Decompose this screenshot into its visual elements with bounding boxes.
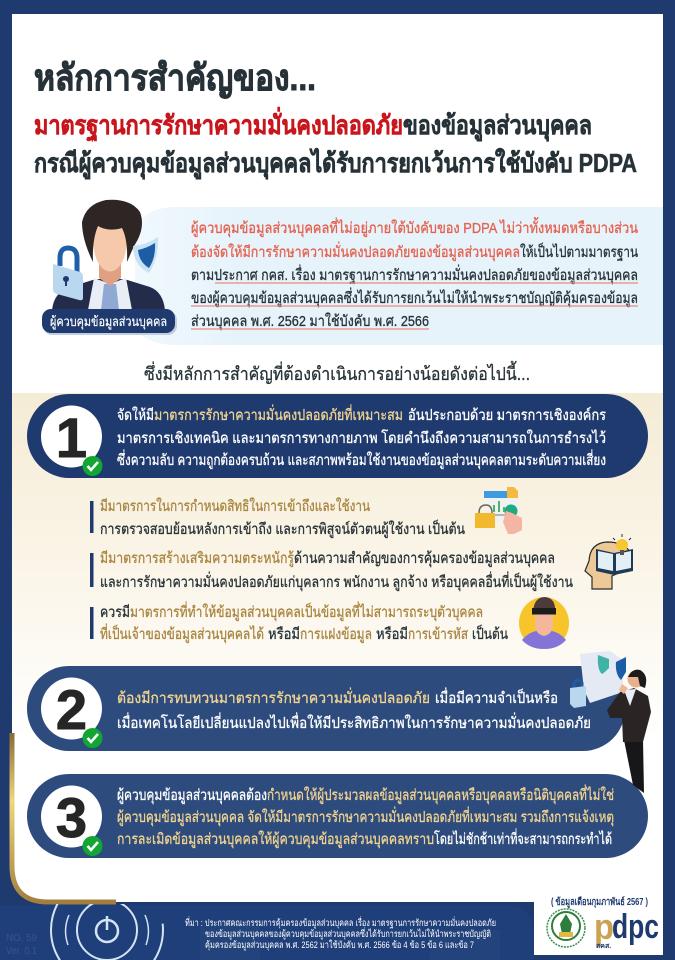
principle 3 text: ผู้ควบคุมข้อมูลส่วนบุคคลต้อง (117, 787, 267, 805)
principle 1 text (117, 404, 606, 470)
principle 2 text: เมื่อมีความจำเป็นหรือ (435, 687, 558, 707)
number 3 badge (41, 786, 102, 856)
icon: padlock (53, 248, 83, 300)
panel: principle 1 (27, 394, 648, 478)
sub-heading: ซึ่งมีหลักการสำคัญที่ต้องดำเนินการอย่างน้อยดังต่อไปนี้... (144, 361, 530, 384)
footer: navy band with power motif (0, 904, 534, 960)
logo: pdpc: dpc (612, 908, 659, 946)
version label: Ver. 0.1 (6, 946, 37, 957)
principle 3 text (117, 784, 614, 849)
icon: head with book (585, 534, 633, 589)
bullet 3: เป็นต้น (472, 624, 508, 643)
bullet 3: หรือมี (376, 626, 408, 643)
icon: shield (133, 237, 158, 273)
beige section background (12, 393, 663, 740)
bullet 3: หรือมี (268, 626, 300, 643)
source note: คุ้มครองข้อมูลส่วนบุคคล พ.ศ. 2562 มาใช้บังคับ พ.ศ. 2566 ข้อ 4 ข้อ 5 ข้อ 6 และข้อ 7 (205, 939, 474, 951)
principle 1 text: มาตรการรักษาความมั่นคงปลอดภัยที่เหมาะสม (154, 404, 403, 424)
number 2 badge: 2 (56, 678, 87, 741)
illustration: businessman with document (570, 651, 651, 793)
number 3 badge: 3 (56, 786, 87, 849)
bullet 2: ด้านความสำคัญของการคุ้มครองข้อมูลส่วนบุคคล (294, 550, 555, 568)
bullet 3: การเข้ารหัส (408, 626, 468, 643)
title block (34, 57, 637, 180)
panel: intro (135, 207, 663, 345)
version label (6, 933, 37, 957)
bullet 2 (90, 550, 573, 592)
principle 3 text: การละเมิดข้อมูลส่วนบุคคลให้ผู้ควบคุมข้อมูลส่วนบุคคลทราบ (117, 830, 434, 849)
principle 1 text: อันประกอบด้วย มาตรการเชิงองค์กร (408, 407, 606, 424)
bullet 2: และการรักษาความมั่นคงปลอดภัยแก่บุคลากร พนักงาน ลูกจ้าง หรือบุคคลอื่นที่เป็นผู้ใช้งาน (100, 571, 573, 592)
title block: มาตรฐานการรักษาความมั่นคงปลอดภัย (34, 106, 403, 143)
icon: access control (475, 487, 522, 534)
logo: pdpc: สคส. (596, 943, 611, 950)
source note (185, 916, 496, 951)
bullet 3: ควรมี (100, 604, 130, 621)
bullet 1 (90, 497, 465, 538)
icon: power symbol (50, 904, 164, 960)
title block: ของข้อมูลส่วนบุคคล (403, 110, 592, 142)
version label: NO. 59 (6, 933, 37, 944)
principle 1 text: มาตรการเชิงเทคนิค และมาตรการทางกายภาพ โดยคำนึงถึงความสามารถในการธำรงไว้ (117, 429, 606, 447)
label: data controller pill: ผู้ควบคุมข้อมูลส่วนบุคคล (50, 314, 167, 330)
number 1 badge: 1 (56, 406, 87, 469)
icon: data controller person (52, 200, 165, 310)
number 2 badge (41, 678, 102, 748)
title block: หลักการสำคัญของ... (34, 57, 316, 99)
principle 3 text: โดยไม่ชักช้าเท่าที่จะสามารถกระทำได้ (434, 828, 612, 848)
principle 2 text (117, 687, 591, 732)
logo: pdpc (594, 906, 659, 950)
bullet 1: มีมาตรการในการกำหนดสิทธิในการเข้าถึงและใช้งาน (100, 497, 370, 515)
logo: emblem (547, 909, 585, 947)
label: data controller pill (42, 309, 177, 335)
intro text: ให้เป็นไปตามมาตรฐาน (520, 242, 638, 261)
bullet 1: การตรวจสอบย้อนหลังการเข้าถึง และการพิสูจน์ตัวตนผู้ใช้งาน เป็นต้น (100, 519, 465, 538)
principle 1 text: จัดให้มี (117, 406, 154, 424)
source note: ของข้อมูลส่วนบุคคลของผู้ควบคุมข้อมูลส่วนบุคคลซึ่งได้รับการยกเว้นไม่ให้นำพระราชบัญญัติ (205, 927, 491, 940)
number 1 badge (41, 406, 102, 476)
bullet 2: มีมาตรการสร้างเสริมความตระหนักรู้ (100, 550, 294, 567)
bullet 3: ที่เป็นเจ้าของข้อมูลส่วนบุคคลได้ (100, 623, 264, 644)
panel: principle 3 (27, 774, 648, 858)
intro text: ต้องจัดให้มีการรักษาความมั่นคงปลอดภัยของข้อมูลส่วนบุคคล (191, 241, 520, 262)
principle 2 text: เมื่อเทคโนโลยีเปลี่ยนแปลงไปเพื่อให้มีประสิทธิภาพในการรักษาความมั่นคงปลอดภัย (117, 712, 591, 732)
bullet 3 (90, 601, 508, 644)
panel: principle 2 (27, 666, 625, 751)
gold accent line (12, 733, 116, 902)
logo: pdpc: p (594, 906, 614, 947)
bullet 3: การแฝงข้อมูล (300, 626, 372, 643)
intro text (191, 217, 638, 331)
icon: anonymised person (519, 597, 569, 649)
source note: ที่มา : ประกาศคณะกรรมการคุ้มครองข้อมูลส่วนบุคคล เรื่อง มาตรฐานการรักษาความมั่นคงปลอดภัย (185, 916, 496, 929)
intro text: ส่วนบุคคล พ.ศ. 2562 มาใช้บังคับ พ.ศ. 2566 (191, 312, 429, 331)
bullet 3: มาตรการที่ทำให้ข้อมูลส่วนบุคคลเป็นข้อมูลที่ไม่สามารถระบุตัวบุคคล (130, 601, 483, 622)
principle 2 text: ต้องมีการทบทวนมาตรการรักษาความมั่นคงปลอดภัย (117, 687, 430, 707)
